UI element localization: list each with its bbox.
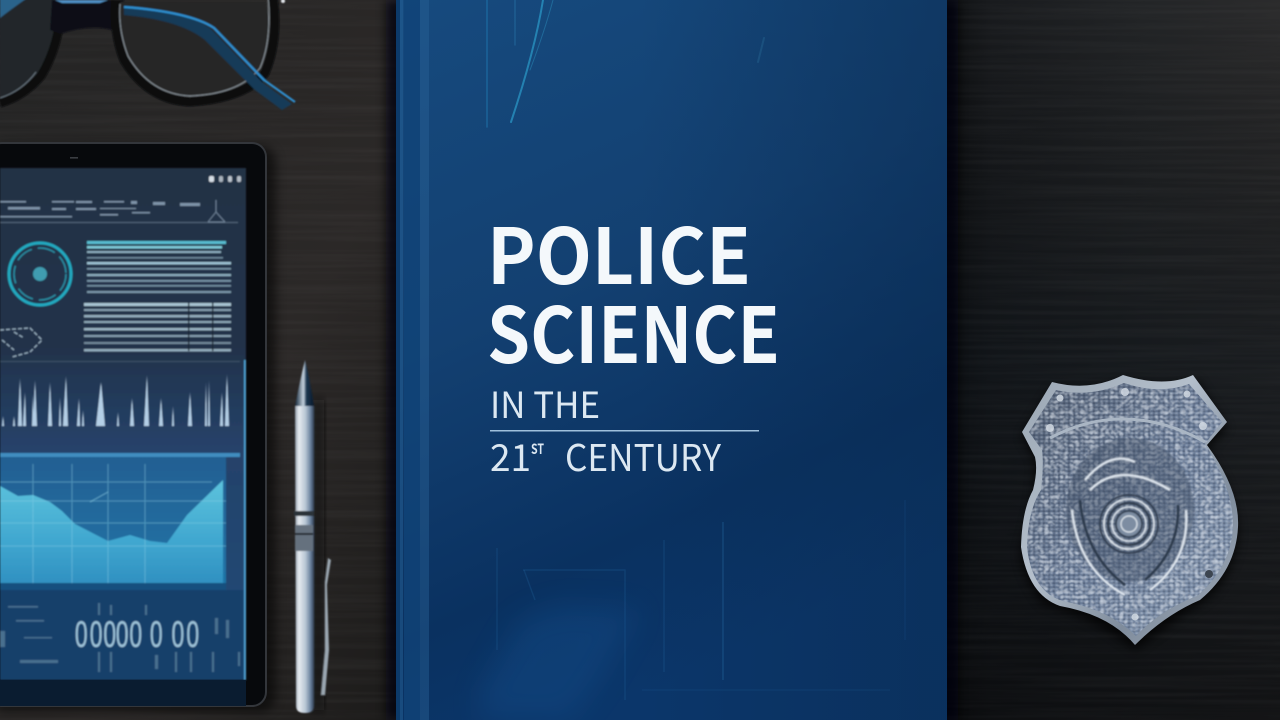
book cover	[396, 0, 947, 720]
police badge	[1020, 375, 1240, 650]
status icons	[209, 176, 241, 182]
pen band	[294, 511, 314, 551]
cover streaks, top	[487, 0, 764, 127]
line chart area	[0, 480, 223, 585]
tablet shadow	[0, 146, 276, 712]
pen shadow	[312, 400, 324, 710]
spike chart	[2, 374, 229, 426]
book shadow	[386, 0, 958, 720]
badge screw	[1205, 570, 1213, 578]
digit readout: 00000000	[75, 613, 199, 655]
lower bezel reflection	[0, 680, 246, 706]
header text strips	[0, 201, 238, 223]
tablet body	[0, 143, 266, 706]
subtitle line 2: 21	[490, 428, 531, 482]
badge rim	[1021, 375, 1238, 645]
pen clip	[321, 558, 331, 695]
desk: left side	[0, 0, 400, 720]
data table two	[84, 303, 231, 351]
subtitle line 2 continued: CENTURY	[565, 428, 721, 482]
desk: right side	[945, 0, 1280, 720]
subtitle rule	[490, 430, 759, 432]
cover streaks, bottom	[497, 500, 905, 700]
tablet	[0, 143, 276, 712]
right lens	[115, 0, 275, 102]
book title	[487, 196, 780, 482]
book spine	[396, 0, 429, 720]
radar ring	[9, 243, 71, 305]
cover bottom glow	[480, 605, 640, 720]
badge face	[1027, 383, 1233, 636]
network map	[0, 328, 42, 357]
badge arch	[1050, 419, 1205, 442]
bottom data panel	[0, 590, 244, 680]
title line 1: POLICE	[487, 196, 751, 307]
left lens	[0, 0, 62, 103]
glasses top highlight	[55, 0, 108, 3]
small tripod icon	[208, 200, 225, 222]
camera	[70, 157, 78, 159]
tablet screen	[0, 168, 246, 680]
chart grid	[0, 464, 226, 585]
pen barrel	[295, 406, 314, 713]
data table one	[87, 241, 231, 293]
separator line	[0, 361, 240, 362]
glasses temple arm	[124, 7, 295, 110]
bridge	[50, 0, 124, 34]
glint	[281, 0, 285, 3]
badge texture	[1027, 384, 1233, 635]
badge rosettes	[1046, 388, 1207, 620]
title line 2: SCIENCE	[487, 275, 780, 386]
faint readout marks	[0, 603, 240, 672]
ordinal suffix: ST	[531, 439, 544, 459]
subtitle line 1: IN THE	[490, 377, 600, 429]
book	[386, 0, 958, 720]
pen	[294, 360, 331, 713]
badge shadow	[1021, 380, 1238, 650]
glasses	[0, 0, 295, 110]
badge central seal	[1066, 438, 1194, 595]
pen tip	[295, 360, 314, 406]
line chart panel	[0, 453, 240, 590]
